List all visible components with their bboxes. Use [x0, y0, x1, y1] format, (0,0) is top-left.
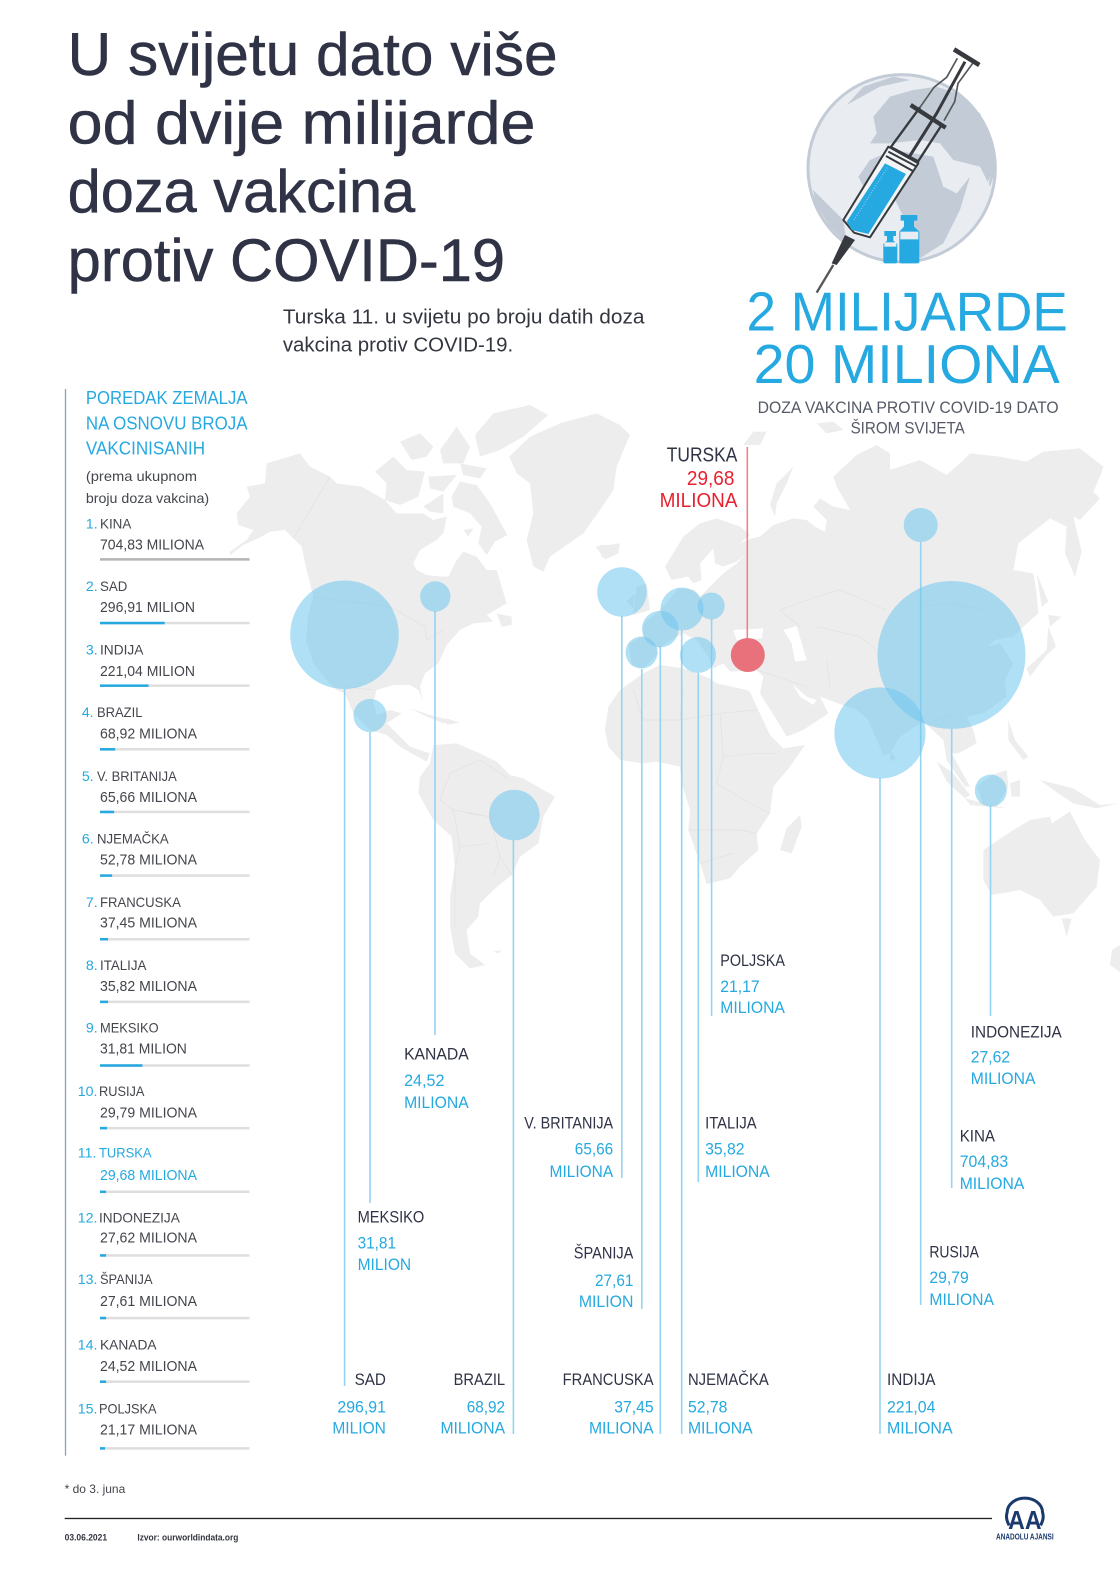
rank 9: 9. — [86, 1019, 98, 1035]
rank 5: 65,66 MILIONA — [100, 790, 197, 806]
label: Španija: 27,61 — [595, 1271, 633, 1290]
rank 7 — [86, 894, 250, 940]
rank 8: ITALIJA — [100, 957, 147, 973]
label: Brazil: 68,92 — [467, 1397, 505, 1416]
label: Njemačka: NJEMAČKA — [688, 1370, 769, 1389]
rank 4: 68,92 MILIONA — [100, 726, 197, 742]
rank 15: POLJSKA — [99, 1400, 157, 1416]
rank 3: 3. — [86, 642, 98, 658]
rank 7: 7. — [86, 894, 98, 910]
rank 8: 35,82 MILIONA — [100, 979, 197, 995]
label: Indija: MILIONA — [887, 1418, 953, 1437]
label: Rusija — [929, 1244, 995, 1309]
rank 10: RUSIJA — [99, 1083, 145, 1099]
label: Rusija: RUSIJA — [929, 1244, 979, 1262]
ranking heading: VAKCINISANIH — [86, 438, 205, 459]
label: Indonezija: MILIONA — [971, 1069, 1036, 1088]
rank 10: 10. — [78, 1083, 97, 1099]
label: Kina: MILIONA — [960, 1174, 1025, 1193]
label: Poljska: POLJSKA — [720, 952, 785, 970]
label: SAD: 296,91 — [337, 1397, 386, 1416]
label: Italija — [705, 1114, 771, 1181]
label: Brazil — [440, 1371, 506, 1437]
rank 15: 15. — [78, 1400, 97, 1416]
rank 11 (Turkey highlighted): 29,68 MILIONA — [100, 1168, 197, 1184]
label: Poljska — [720, 952, 786, 1017]
logo: Anadolu Ajansi: AA — [1008, 1505, 1042, 1535]
label: V. Britanija: V. BRITANIJA — [524, 1114, 613, 1132]
label: Poljska: 21,17 — [720, 977, 760, 996]
rank 7: FRANCUSKA — [100, 894, 181, 910]
subtitle — [283, 306, 645, 357]
footer: date and source — [65, 1518, 992, 1543]
footer: date and source: 03.06.2021 — [65, 1533, 107, 1543]
label: Indija: 221,04 — [887, 1397, 935, 1416]
label: Njemačka: 52,78 — [688, 1397, 727, 1416]
rank 6: 52,78 MILIONA — [100, 853, 197, 869]
rank 5: 5. — [82, 768, 94, 784]
rank 2 — [86, 578, 250, 624]
label: Španija: ŠPANIJA — [574, 1244, 634, 1263]
label: Španija: MILION — [579, 1292, 633, 1311]
label: Njemačka: MILIONA — [688, 1418, 753, 1437]
rank 15 — [78, 1400, 250, 1450]
label: Turska: TURSKA — [667, 445, 738, 467]
title: od dvije milijarde — [68, 88, 535, 156]
label: V. Britanija — [524, 1114, 614, 1181]
rank 9: 31,81 MILION — [100, 1042, 187, 1058]
label: Njemačka — [688, 1370, 769, 1437]
panel: country ranking — [65, 387, 250, 1456]
map: South America and West Africa borders — [418, 743, 555, 968]
rank 1: 704,83 MILIONA — [100, 538, 204, 554]
leader lines — [345, 447, 991, 1434]
rank 2: SAD — [100, 578, 127, 594]
label: Kina: KINA — [960, 1128, 995, 1146]
label: Francuska: MILIONA — [589, 1418, 654, 1437]
rank 11 (Turkey highlighted) — [78, 1145, 250, 1193]
rank 14 — [78, 1337, 250, 1383]
rank 6: 6. — [82, 831, 94, 847]
label: Poljska: MILIONA — [720, 998, 786, 1017]
rank 3: INDIJA — [100, 642, 144, 658]
label: Kanada — [404, 1046, 470, 1112]
rank 6: NJEMAČKA — [97, 831, 169, 847]
rank 13 — [78, 1271, 250, 1319]
ranking heading: NA OSNOVU BROJA — [86, 412, 248, 433]
bubbles — [290, 508, 1026, 840]
label: Meksiko — [358, 1208, 424, 1274]
world map — [230, 405, 1120, 972]
title: U svijetu dato više — [68, 20, 558, 88]
label: Italija: 35,82 — [705, 1140, 745, 1159]
rank 2: 296,91 MILION — [100, 600, 195, 616]
label: V. Britanija: MILIONA — [550, 1162, 614, 1181]
label: Kanada: 24,52 — [404, 1071, 444, 1090]
ranking heading: broju doza vakcina) — [86, 490, 209, 506]
logo: Anadolu Ajansi: ANADOLU AJANSI — [996, 1533, 1054, 1542]
label: Francuska: 37,45 — [614, 1397, 654, 1416]
label: Turska: 29,68 — [687, 468, 734, 490]
rank 9: MEKSIKO — [100, 1019, 159, 1035]
rank 10: 29,79 MILIONA — [100, 1105, 197, 1121]
rank 12: 12. — [78, 1209, 97, 1225]
rank 12: 27,62 MILIONA — [100, 1231, 197, 1247]
label: Rusija: MILIONA — [929, 1290, 995, 1309]
title: doza vakcina — [68, 157, 415, 225]
title — [68, 20, 558, 294]
label: Kina — [960, 1128, 1025, 1193]
label: Brazil: BRAZIL — [454, 1371, 505, 1389]
headline figure: 20 MILIONA — [754, 334, 1060, 395]
label: Turska — [660, 445, 738, 512]
headline figure: ŠIROM SVIJETA — [851, 418, 966, 437]
label: V. Britanija: 65,66 — [575, 1140, 613, 1159]
label: Kanada: KANADA — [404, 1046, 469, 1064]
label: Rusija: 29,79 — [929, 1268, 969, 1287]
rank 6 — [82, 831, 250, 877]
rank 13: ŠPANIJA — [100, 1271, 153, 1287]
rank 15: 21,17 MILIONA — [100, 1422, 197, 1438]
label: Meksiko: MEKSIKO — [358, 1208, 424, 1226]
rank 1: KINA — [100, 515, 132, 531]
headline figure: 2 MILIJARDE — [747, 281, 1068, 342]
map: Eurasia, Africa, Australia and islands — [600, 422, 1120, 972]
rank 1 — [86, 515, 250, 561]
rank 7: 37,45 MILIONA — [100, 915, 197, 931]
rank 4: 4. — [82, 704, 94, 720]
illustration: globe, syringe and vials — [808, 49, 996, 293]
rank 14: KANADA — [100, 1337, 157, 1353]
label: Indija — [887, 1371, 953, 1437]
label: Italija: MILIONA — [705, 1162, 771, 1181]
vials — [883, 215, 919, 263]
ranking heading: POREDAK ZEMALJA — [86, 387, 248, 408]
label: SAD: SAD — [355, 1371, 386, 1389]
rank 12: INDONEZIJA — [99, 1209, 180, 1225]
syringe — [817, 49, 979, 293]
label: Indija: INDIJA — [887, 1371, 936, 1389]
ranking heading: (prema ukupnom — [86, 468, 197, 484]
rank 5: V. BRITANIJA — [97, 768, 177, 784]
label: SAD: MILION — [332, 1418, 386, 1437]
label: Kanada: MILIONA — [404, 1093, 470, 1112]
rank 2: 2. — [86, 578, 98, 594]
footer: date and source: Izvor: ourworldindata.org — [137, 1533, 238, 1543]
logo: Anadolu Ajansi — [996, 1498, 1054, 1542]
ranking heading — [86, 387, 248, 506]
rank 11 (Turkey highlighted): TURSKA — [99, 1145, 152, 1161]
rank 12 — [78, 1209, 250, 1257]
rank 4 — [82, 704, 250, 751]
rank 14: 14. — [78, 1337, 97, 1353]
rank 14: 24,52 MILIONA — [100, 1359, 197, 1375]
label: Turska: MILIONA — [660, 490, 738, 512]
rank 8 — [86, 957, 250, 1003]
label: Francuska — [563, 1371, 654, 1437]
label: Brazil: MILIONA — [440, 1418, 506, 1437]
footnote: * do 3. juna — [65, 1482, 126, 1496]
rank 10 — [78, 1083, 250, 1129]
title: protiv COVID-19 — [68, 226, 505, 294]
label: Meksiko: 31,81 — [358, 1234, 396, 1253]
rank 8: 8. — [86, 957, 98, 973]
subtitle: Turska 11. u svijetu po broju datih doza — [283, 306, 645, 328]
label: Indonezija: INDONEZIJA — [971, 1023, 1062, 1041]
headline figure — [747, 281, 1068, 437]
label: Italija: ITALIJA — [705, 1114, 757, 1132]
rank 3 — [86, 642, 250, 687]
label: SAD — [332, 1371, 386, 1437]
rank 13: 27,61 MILIONA — [100, 1294, 197, 1310]
label: Francuska: FRANCUSKA — [563, 1371, 654, 1389]
label: Indonezija — [971, 1023, 1062, 1088]
rank 3: 221,04 MILION — [100, 664, 195, 680]
map: North America, Greenland and Arctic islands — [230, 405, 630, 762]
headline figure: DOZA VAKCINA PROTIV COVID-19 DATO — [758, 398, 1059, 417]
rank 4: BRAZIL — [97, 704, 143, 720]
rank 11 (Turkey highlighted): 11. — [78, 1145, 96, 1161]
subtitle: vakcina protiv COVID-19. — [283, 335, 513, 357]
rank 1: 1. — [86, 515, 98, 531]
label: Indonezija: 27,62 — [971, 1048, 1010, 1067]
label: Kina: 704,83 — [960, 1152, 1008, 1171]
rank 9 — [86, 1019, 250, 1067]
rank 5 — [82, 768, 250, 813]
label: Meksiko: MILION — [358, 1255, 411, 1274]
rank 13: 13. — [78, 1271, 97, 1287]
label: Španija — [574, 1244, 634, 1311]
